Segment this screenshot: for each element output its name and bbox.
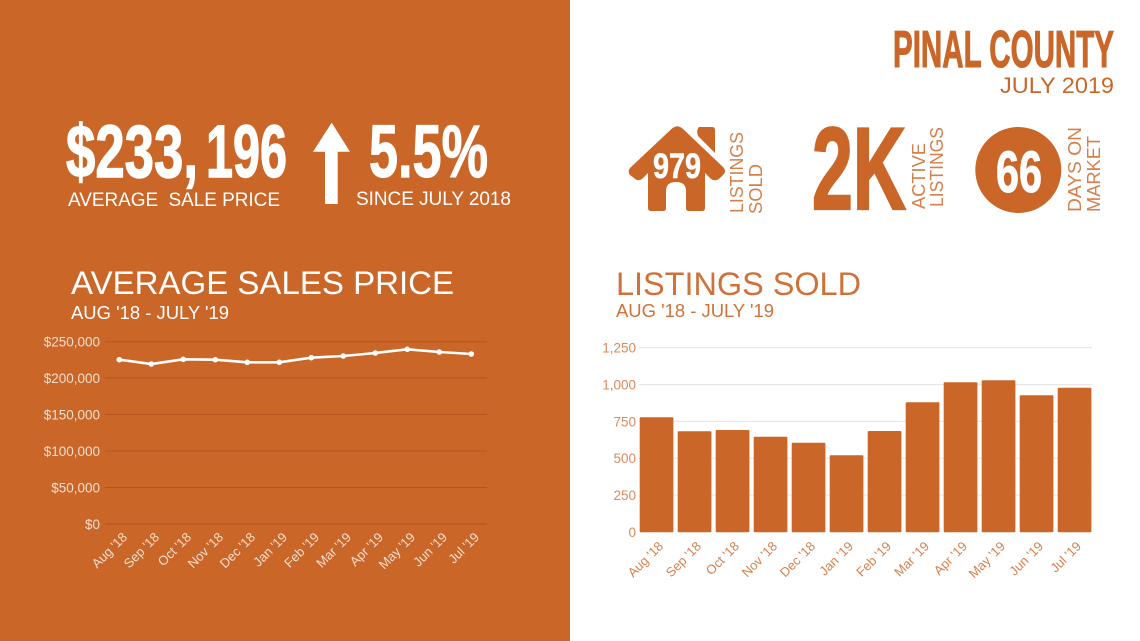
heading: listings sold: AUG '18 - JULY '19 bbox=[616, 301, 774, 321]
x axis labels: Apr '19 bbox=[931, 539, 970, 578]
x axis labels: Oct '18 bbox=[155, 530, 194, 569]
panel: left background bbox=[0, 0, 570, 641]
y axis labels: $50,000 bbox=[51, 480, 100, 496]
x axis labels: Mar '19 bbox=[891, 539, 932, 579]
panel: left headline stats bbox=[66, 110, 511, 211]
x axis labels: Feb '19 bbox=[853, 539, 894, 580]
y axis labels: 500 bbox=[613, 451, 636, 466]
x axis labels: Aug '18 bbox=[89, 530, 130, 571]
x axis labels: Apr '19 bbox=[347, 530, 386, 569]
x axis labels: Mar '19 bbox=[313, 530, 354, 570]
y axis labels bbox=[602, 340, 636, 540]
line chart: average sales price bbox=[44, 334, 487, 572]
y axis labels: $150,000 bbox=[44, 408, 100, 422]
y axis labels: 750 bbox=[613, 414, 636, 430]
listings sold value: 979 bbox=[653, 147, 701, 186]
y axis labels: $250,000 bbox=[44, 334, 100, 350]
x axis labels: Dec '18 bbox=[777, 539, 818, 580]
y axis labels: 0 bbox=[628, 525, 636, 540]
y axis labels: 250 bbox=[613, 488, 636, 503]
x axis labels: Jan '19 bbox=[250, 530, 290, 569]
icon: days on market circle bbox=[975, 127, 1061, 213]
active listings value: 2K bbox=[812, 103, 906, 234]
active listings label: LISTINGS bbox=[926, 127, 947, 207]
active listings label: ACTIVE bbox=[908, 143, 929, 209]
average sale price label: AVERAGE SALE PRICE bbox=[68, 190, 280, 211]
percent change value: 5.5% bbox=[369, 110, 488, 193]
average sale price value: $233, bbox=[66, 110, 198, 193]
days on market label: MARKET bbox=[1083, 136, 1104, 212]
heading: average sales price: AVERAGE SALES PRICE bbox=[71, 265, 454, 301]
x axis labels: Oct '18 bbox=[703, 539, 742, 578]
x axis labels: May '19 bbox=[376, 530, 418, 572]
y axis labels: $200,000 bbox=[44, 371, 100, 386]
y axis labels: $100,000 bbox=[44, 444, 100, 459]
bars bbox=[640, 380, 1091, 532]
x axis labels: Jul '19 bbox=[445, 530, 482, 566]
x axis labels: Jan '19 bbox=[816, 539, 856, 578]
x axis labels bbox=[625, 539, 1084, 581]
x axis labels: Feb '19 bbox=[281, 530, 322, 571]
x axis labels bbox=[89, 530, 482, 572]
x axis labels: Jun '19 bbox=[410, 530, 450, 569]
icon: house with listings sold bbox=[629, 126, 725, 211]
listings sold label bbox=[726, 132, 766, 214]
x axis labels: Nov '18 bbox=[185, 530, 226, 571]
heading: listings sold: LISTINGS SOLD bbox=[616, 266, 861, 302]
y axis labels: 1,000 bbox=[602, 378, 636, 392]
x axis labels: May '19 bbox=[966, 539, 1008, 581]
data line bbox=[116, 346, 474, 367]
heading: average sales price bbox=[71, 265, 454, 323]
x axis labels: Aug '18 bbox=[625, 539, 666, 580]
percent change label: SINCE JULY 2018 bbox=[356, 189, 511, 210]
days on market label: DAYS ON bbox=[1064, 127, 1085, 212]
x axis labels: Nov '18 bbox=[739, 539, 780, 580]
active listings label bbox=[908, 127, 947, 209]
heading: average sales price: AUG '18 - JULY '19 bbox=[71, 303, 229, 323]
subtitle: July 2019: JULY 2019 bbox=[1000, 73, 1114, 98]
y axis labels: 1,250 bbox=[602, 340, 636, 356]
listings sold label: SOLD bbox=[745, 164, 766, 214]
icon: up arrow bbox=[313, 123, 350, 204]
listings sold label: LISTINGS bbox=[726, 132, 747, 213]
heading: listings sold bbox=[616, 266, 861, 321]
y axis labels: $0 bbox=[85, 517, 100, 532]
average sale price value: 196 bbox=[206, 110, 287, 193]
y axis labels bbox=[44, 334, 100, 532]
x axis labels: Sep '18 bbox=[121, 530, 162, 571]
x axis labels: Dec '18 bbox=[217, 530, 258, 571]
x axis labels: Jun '19 bbox=[1006, 539, 1046, 578]
days on market label bbox=[1064, 127, 1104, 212]
x axis labels: Sep '18 bbox=[663, 539, 704, 580]
x axis labels: Jul '19 bbox=[1047, 539, 1084, 575]
icon: days on market circle: 66 bbox=[996, 140, 1042, 205]
bar chart: listings sold bbox=[602, 340, 1092, 581]
